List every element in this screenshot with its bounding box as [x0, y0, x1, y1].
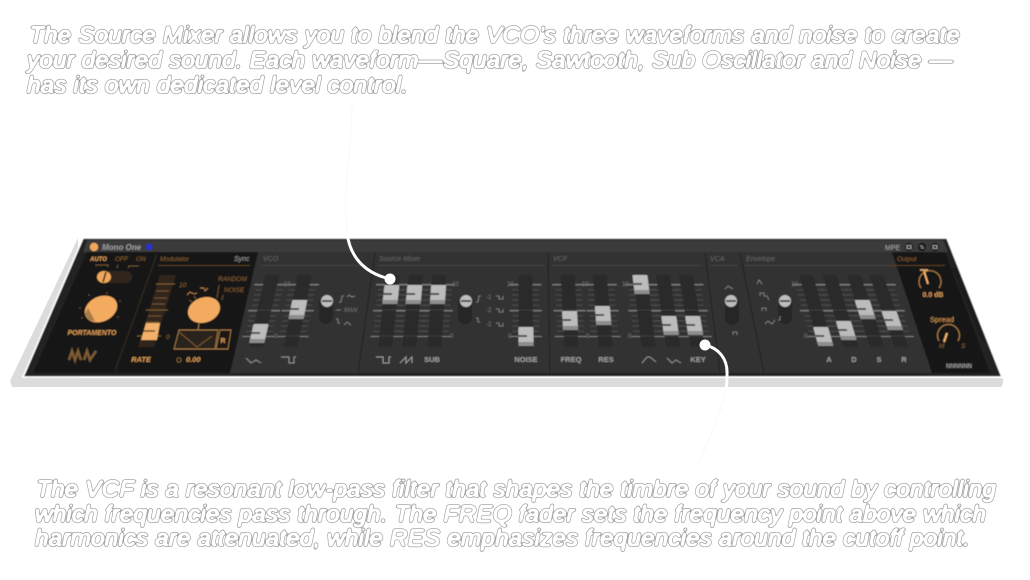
VCF fader: LFO	[656, 275, 681, 347]
section dividers	[115, 253, 764, 373]
source mixer fader: square	[378, 275, 401, 347]
panel: grey fader section	[230, 252, 932, 373]
envelope labels: D	[851, 355, 857, 364]
source mixer scale	[450, 282, 514, 340]
MPE label: MPE	[885, 245, 900, 252]
rate label: RATE	[131, 355, 152, 364]
section headings: Sync	[234, 256, 250, 263]
envelope scale: 0	[804, 334, 808, 340]
VCF scale: 0	[586, 334, 590, 340]
panel: left black section	[33, 252, 258, 373]
mode labels: ON	[136, 256, 146, 263]
label: NOISE: NOISE	[514, 355, 538, 364]
source mixer selector switch	[458, 295, 503, 328]
VCF scale	[582, 282, 632, 340]
arrow: source mixer callout	[346, 105, 396, 284]
VCO fader scale	[274, 282, 291, 340]
panel: drop shadow	[10, 238, 1003, 387]
panel: synth device	[23, 238, 1002, 377]
VCA selector switch	[725, 286, 739, 335]
icon: logo	[69, 351, 96, 360]
modulator envelope display	[174, 323, 231, 349]
rate value	[177, 355, 201, 364]
text block: VCF description: harmonics are attenuated, while RES emphasizes frequencies around the cutoff point.	[35, 525, 970, 552]
output gain knob: 0.0 dB	[922, 292, 944, 299]
source mixer fader: noise	[518, 275, 534, 347]
rate fader: 0	[166, 334, 170, 341]
panel: output black section	[892, 252, 990, 373]
section headings: VCO	[263, 256, 279, 263]
header buttons	[905, 243, 939, 251]
VCO fader scale: 10	[284, 282, 291, 288]
device name: Mono One	[102, 243, 142, 252]
spread knob: S	[961, 343, 966, 350]
VCF fader: envelope	[632, 275, 656, 347]
source mixer selector switch: -2	[486, 322, 492, 328]
envelope fader: R	[869, 275, 909, 347]
envelope labels	[826, 355, 907, 364]
text block: source mixer description: your desired sound. Each waveform—Square, Sawtooth, Sub Oscillator and Noise —	[25, 47, 953, 74]
device body	[23, 238, 1002, 377]
header bar	[83, 240, 948, 252]
arrow: VCF callout	[697, 340, 727, 465]
VCF scale: 0	[628, 334, 632, 340]
text block: VCF description	[35, 476, 996, 552]
section headings: VCA	[710, 256, 725, 263]
portamento controls	[67, 256, 146, 360]
label: FREQ: FREQ	[561, 355, 582, 364]
source mixer scale: 0	[450, 334, 454, 340]
spread knob	[930, 315, 966, 350]
icon: power button	[90, 243, 98, 251]
mode toggle	[97, 271, 132, 283]
portamento label: PORTAMENTO	[67, 330, 117, 337]
envelope labels: S	[876, 355, 882, 364]
label: SUB: SUB	[424, 355, 440, 364]
envelope scale	[791, 282, 808, 340]
logo text: NNNNNN	[946, 364, 972, 370]
source mixer scale: 10	[507, 282, 514, 288]
source mixer selector switch: -2	[486, 308, 492, 314]
VCF icons	[642, 357, 681, 363]
envelope scale: 10	[791, 282, 798, 288]
text block: VCF description: which frequencies pass through. The FREQ fader sets the frequency point above which	[35, 501, 986, 528]
section headings: Output	[897, 256, 918, 263]
section underlines	[158, 264, 945, 266]
envelope fader: D	[822, 275, 859, 347]
text block: source mixer description: has its own dedicated level control.	[27, 72, 408, 99]
rate fader	[137, 275, 187, 347]
source mixer icons	[376, 357, 412, 363]
VCF fader: RES	[592, 275, 613, 347]
source mixer fader: sub	[427, 275, 447, 347]
icon: blue badge	[146, 244, 152, 250]
envelope fader: S	[847, 275, 885, 347]
label: RES: RES	[598, 355, 614, 364]
source mixer scale: 0	[508, 334, 512, 340]
section headings: Source Mixer	[379, 256, 421, 263]
VCF scale: 10	[622, 282, 629, 288]
portamento knob	[79, 290, 122, 328]
section headings	[160, 256, 918, 263]
source mixer selector switch: -1	[486, 295, 492, 301]
output edge strip	[952, 268, 986, 342]
envelope fader: A	[798, 275, 834, 347]
rate value: 0.00	[186, 355, 201, 364]
VCO wave icons	[246, 357, 296, 363]
VCF scale: 10	[582, 282, 589, 288]
mode labels: OFF	[115, 256, 129, 263]
section headings: Modulator	[160, 256, 190, 263]
envelope selector switch	[757, 280, 792, 324]
mode labels: AUTO	[89, 257, 107, 263]
VCO fader scale: 0	[274, 334, 278, 340]
VCO fader 1	[248, 275, 280, 347]
text block: source mixer description	[25, 22, 960, 99]
modulator shape knob: RANDOM	[218, 276, 247, 283]
spread knob: Spread	[930, 315, 954, 324]
section headings: VCF	[553, 256, 568, 263]
text block: source mixer description: The Source Mixer allows you to blend the VCO's three waveforms and noise to create	[29, 22, 960, 49]
rate fader: 10	[179, 282, 187, 289]
source mixer scale: 10	[452, 282, 459, 288]
output gain knob	[919, 270, 944, 299]
VCF fader: KEY	[678, 275, 705, 347]
spread knob: M	[939, 343, 945, 350]
modulator envelope display: R	[220, 338, 226, 345]
modulator shape knob	[184, 276, 247, 327]
source mixer fader: sawtooth	[402, 275, 423, 347]
VCO selector switch: MAN	[344, 308, 358, 314]
section headings: Envelope	[746, 256, 775, 263]
text block: VCF description: The VCF is a resonant low-pass filter that shapes the timbre of your sound by controlling	[36, 476, 996, 503]
label: KEY: KEY	[690, 355, 706, 364]
envelope labels: A	[826, 355, 832, 364]
VCO fader 2	[283, 275, 312, 347]
modulator shape knob: NOISE	[224, 287, 245, 294]
envelope labels: R	[901, 355, 907, 364]
VCF fader: FREQ	[560, 275, 579, 347]
VCO selector switch	[319, 295, 358, 325]
mode labels	[89, 256, 146, 268]
